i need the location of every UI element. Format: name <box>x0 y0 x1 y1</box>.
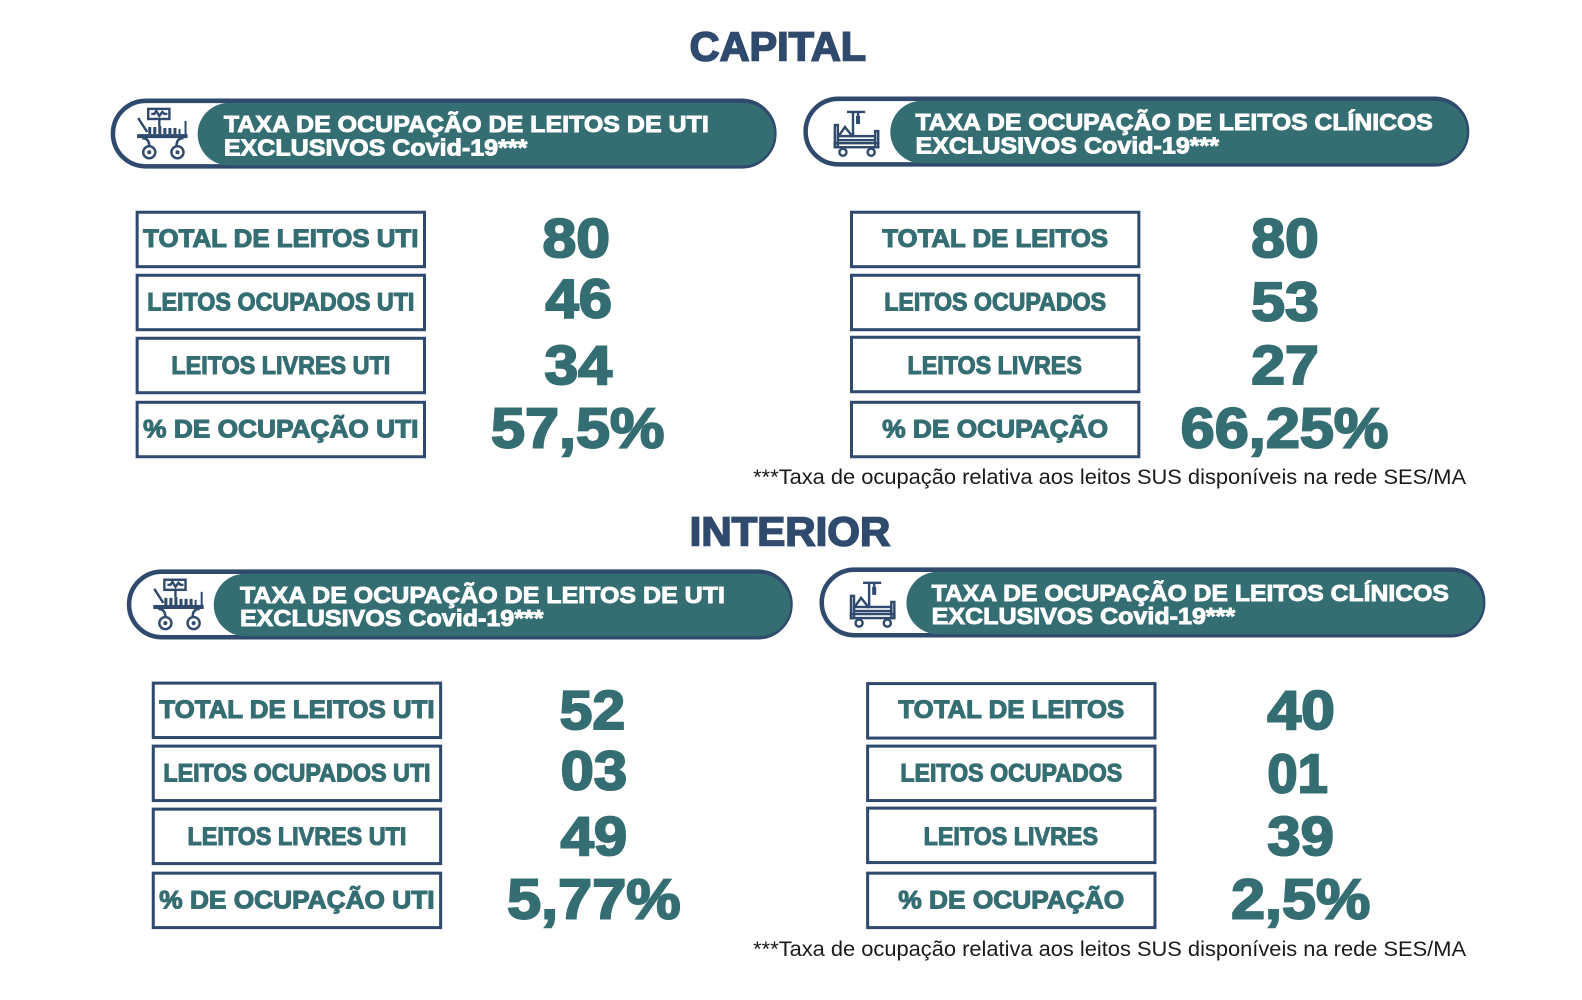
table: capital clinical: 80 <box>1251 208 1319 269</box>
footnote interior: ***Taxa de ocupação relativa aos leitos SUS disponíveis na rede SES/MA <box>753 938 1467 961</box>
table: capital UTI: TOTAL DE LEITOS UTI <box>143 225 418 253</box>
header text: TAXA DE OCUPAÇÃO DE LEITOS DE UTI <box>224 110 709 137</box>
header text <box>932 579 1449 629</box>
table: capital UTI: LEITOS LIVRES UTI <box>171 352 390 380</box>
table: capital UTI: % DE OCUPAÇÃO UTI <box>143 414 418 444</box>
table: capital UTI: 46 <box>545 269 612 330</box>
table: interior UTI <box>153 680 681 931</box>
table: capital clinical: % DE OCUPAÇÃO <box>882 414 1108 444</box>
table: interior UTI: 03 <box>561 740 627 801</box>
table: interior clinical: LEITOS OCUPADOS <box>900 759 1122 787</box>
table: interior UTI: 52 <box>560 680 625 741</box>
header text <box>224 110 709 160</box>
table: interior clinical: TOTAL DE LEITOS <box>898 696 1124 724</box>
table: interior clinical: 39 <box>1267 806 1334 867</box>
panel header: capital UTI <box>113 101 774 166</box>
header text: EXCLUSIVOS Covid-19*** <box>932 603 1235 629</box>
header text: EXCLUSIVOS Covid-19*** <box>916 132 1219 158</box>
panel header: interior UTI <box>129 572 790 637</box>
table: interior UTI: TOTAL DE LEITOS UTI <box>159 696 435 724</box>
table: capital UTI <box>137 208 664 460</box>
table: interior clinical: 40 <box>1267 680 1335 741</box>
table: capital clinical: 66,25% <box>1181 397 1388 460</box>
footnote capital: ***Taxa de ocupação relativa aos leitos SUS disponíveis na rede SES/MA <box>753 466 1467 489</box>
icon: clinical bed interior <box>851 583 894 627</box>
table: capital clinical <box>851 208 1388 460</box>
table: capital UTI: 34 <box>544 335 612 396</box>
table: interior UTI: LEITOS OCUPADOS UTI <box>163 759 431 787</box>
icon: clinical bed capital <box>835 112 878 156</box>
header text: EXCLUSIVOS Covid-19*** <box>224 134 527 160</box>
table: interior clinical: 2,5% <box>1231 868 1370 931</box>
title: INTERIOR: INTERIOR <box>690 508 890 554</box>
table: capital clinical: 27 <box>1251 335 1319 396</box>
header text: EXCLUSIVOS Covid-19*** <box>240 605 543 631</box>
table: interior clinical: % DE OCUPAÇÃO <box>898 884 1124 914</box>
table: capital UTI: LEITOS OCUPADOS UTI <box>147 289 414 317</box>
table: capital clinical: LEITOS LIVRES <box>907 352 1082 380</box>
header text: TAXA DE OCUPAÇÃO DE LEITOS CLÍNICOS <box>916 108 1433 135</box>
table: interior clinical: 01 <box>1267 743 1328 804</box>
header text: TAXA DE OCUPAÇÃO DE LEITOS DE UTI <box>240 581 725 608</box>
icon: ICU bed interior <box>153 580 204 629</box>
table: capital clinical: TOTAL DE LEITOS <box>882 225 1108 253</box>
header text <box>916 108 1433 158</box>
table: interior UTI: 49 <box>561 806 627 867</box>
panel header: capital clinical <box>806 99 1467 164</box>
icon: ICU bed capital <box>137 109 188 158</box>
table: capital UTI: 57,5% <box>491 397 664 460</box>
table: interior UTI: 5,77% <box>507 868 681 931</box>
table: capital UTI: 80 <box>542 208 610 269</box>
title: CAPITAL: CAPITAL <box>690 23 866 69</box>
table: capital clinical: 53 <box>1251 272 1319 333</box>
table: interior clinical: LEITOS LIVRES <box>924 823 1098 851</box>
table: interior UTI: LEITOS LIVRES UTI <box>188 823 406 851</box>
table: interior UTI: % DE OCUPAÇÃO UTI <box>159 884 435 914</box>
panel header: interior clinical <box>822 570 1483 635</box>
table: interior clinical <box>868 680 1370 931</box>
table: capital clinical: LEITOS OCUPADOS <box>884 289 1106 317</box>
header text <box>240 581 725 631</box>
header text: TAXA DE OCUPAÇÃO DE LEITOS CLÍNICOS <box>932 579 1449 606</box>
